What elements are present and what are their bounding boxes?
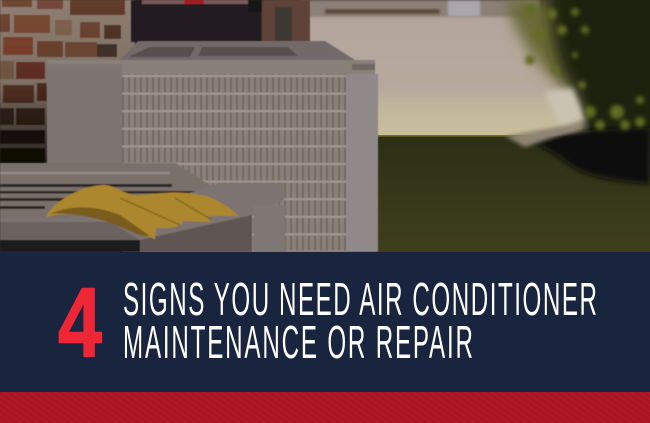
lawn <box>378 135 650 252</box>
brick wall <box>0 0 135 165</box>
title text <box>123 272 597 368</box>
numeral 4: 4 <box>58 268 102 378</box>
photo: air conditioner units in a backyard <box>0 0 650 252</box>
small AC unit with gloves <box>0 163 285 252</box>
tool bag <box>131 0 310 42</box>
icon: yellow work gloves <box>46 185 239 239</box>
title text: MAINTENANCE OR REPAIR <box>123 315 473 368</box>
large AC unit <box>47 41 378 252</box>
title band <box>0 252 650 392</box>
title text: SIGNS YOU NEED AIR CONDITIONER <box>123 272 597 325</box>
red textured footer band <box>0 392 650 423</box>
tree and shrub <box>505 0 650 184</box>
fence background <box>300 0 590 137</box>
